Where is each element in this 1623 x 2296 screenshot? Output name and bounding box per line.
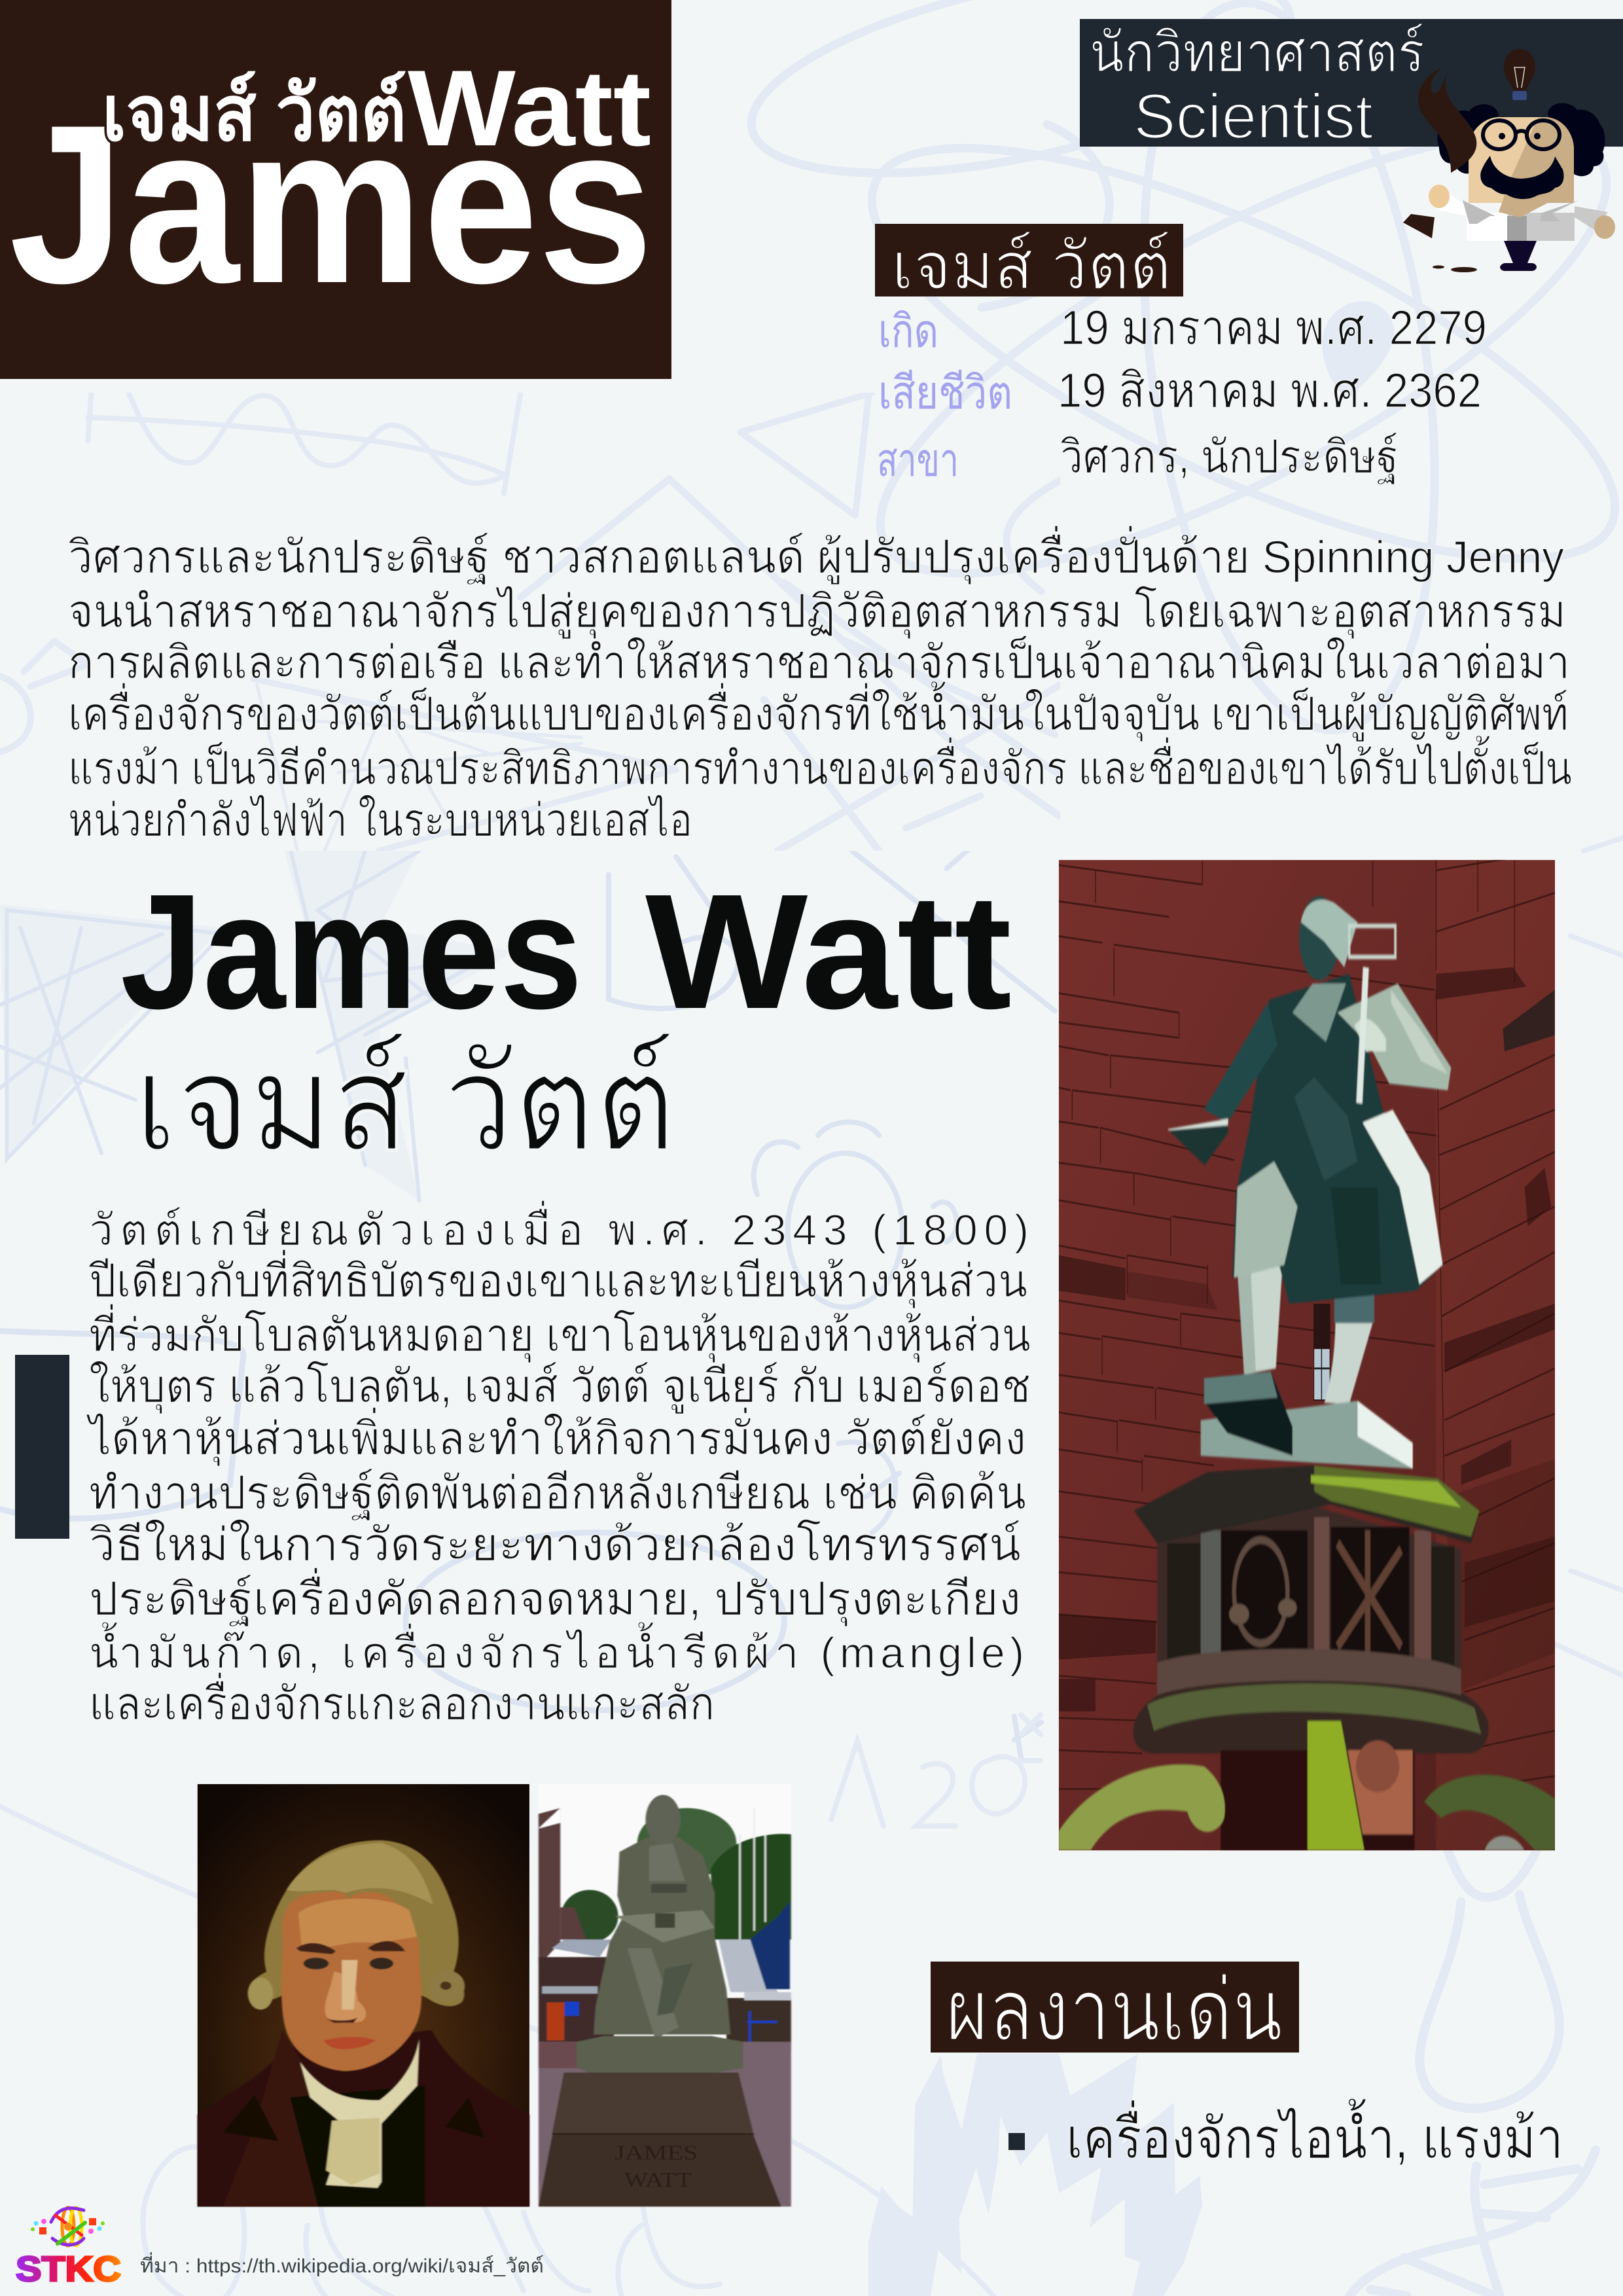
biography paragraph: ทำงานประดิษฐ์ติดพันต่ออีกหลังเกษียณ เช่น คิดค้น [89,1467,1026,1520]
biography paragraph: ปีเดียวกับที่สิทธิบัตรของเขาและทะเบียนห้างหุ้นส่วน [88,1249,1027,1309]
death value: 19 สิงหาคม พ.ศ. 2362 [1058,363,1482,418]
biography paragraph: และเครื่องจักรแกะลอกงานแกะสลัก [89,1672,715,1729]
plinth inscription: WATT [624,2169,692,2192]
category English: Scientist [1133,81,1373,152]
moustache [1480,156,1564,199]
intro paragraph: จนนำสหราชอาณาจักรไปสู่ยุคของการปฏิวัติอุตสาหกรรม โดยเฉพาะอุตสาหกรรม [68,585,1566,639]
face [281,1892,421,2071]
logo atom mark [31,2208,105,2246]
wig [248,1840,464,2006]
photo: portrait painting of Watt [196,1784,531,2208]
biography paragraph: ให้บุตร แล้วโบลตัน, เจมส์ วัตต์ จูเนียร์ กับ เมอร์ดอช [89,1360,1031,1414]
statue plinth and book [1201,1372,1413,1469]
scribbled fan doodle [0,851,1058,1759]
icon: cartoon scientist [1403,49,1615,272]
head [1469,117,1574,203]
background atom doodle [734,0,1623,749]
name label text: เจมส์ วัตต์ [891,230,1171,303]
coat [1467,213,1508,241]
coat [198,2030,529,2206]
glasses [1483,120,1560,149]
hands [1429,185,1450,208]
title block [0,0,671,379]
intro paragraph: หน่วยกำลังไฟฟ้า ในระบบหน่วยเอสไอ [68,794,692,846]
category banner [1080,19,1623,152]
title Thai name: เจมส์ วัตต์ [102,71,406,157]
intro paragraph [68,526,1572,846]
title Watt: Watt [408,48,651,168]
legs [1500,241,1537,271]
biography paragraph [86,1200,1031,1729]
highlight item: เครื่องจักรไอน้ำ, แรงม้า [1066,2098,1563,2170]
facts table [877,300,1487,486]
background graph, triangle and cone doodles [0,393,1060,851]
photo: seated Watt statue [537,1795,793,2208]
large English heading: James [120,860,582,1043]
biography paragraph: ที่ร่วมกับโบลตันหมดอายุ เขาโอนหุ้นของห้างหุ้นส่วน [89,1304,1031,1363]
trees [561,1890,618,1943]
plinth inscription [615,2142,698,2192]
pedestal [1059,1465,1555,1850]
logo [16,2208,121,2289]
statue [594,1837,730,2034]
birth label: เกิด [878,306,938,357]
category Thai: นักวิทยาศาสตร์ [1090,22,1425,83]
intro paragraph: วิศวกรและนักประดิษฐ์ ชาวสกอตแลนด์ ผู้ปรับปรุงเครื่องปั่นด้าย Spinning Jenny [68,526,1564,585]
plinth [577,2036,743,2073]
field label: สาขา [877,435,959,486]
large English heading [120,860,1012,1043]
icon: light bulb [1504,49,1535,100]
bullet [1008,2133,1025,2150]
highlights label [931,1962,1299,2058]
title James: James [9,79,653,331]
buildings [539,1808,560,1966]
biography paragraph: ประดิษฐ์เครื่องคัดลอกจดหมาย, ปรับปรุงตะเกียง [89,1568,1021,1627]
smoke [1418,68,1476,173]
background flames and flask doodles [868,1850,1600,2296]
biography paragraph: น้ำมันก๊าด, เครื่องจักรไอน้ำรีดผ้า (mangle) [89,1622,1024,1677]
logo wordmark: STKC [16,2250,121,2289]
biography paragraph: ได้หาหุ้นส่วนเพิ่มและทำให้กิจการมั่นคง วัตต์ยังคง [86,1407,1026,1467]
death label: เสียชีวิต [878,367,1012,418]
source credit: ที่มา : https://th.wikipedia.org/wiki/เจมส์_วัตต์ [140,2252,544,2277]
highlights label text: ผลงานเด่น [946,1962,1283,2058]
photo: Watt statue on pedestal [1059,860,1555,1851]
puddles [1451,267,1477,272]
cravat [300,2039,419,2188]
birth value: 19 มกราคม พ.ศ. 2279 [1060,300,1487,355]
biography paragraph: วิธีใหม่ในการวัดระยะทางด้วยกล้องโทรทรรศน์ [89,1518,1021,1570]
large English heading: Watt [645,860,1012,1043]
accent bar [15,1355,69,1539]
name label [875,224,1183,303]
flask liquid [1403,214,1435,238]
statue figure [1168,896,1451,1404]
field value: วิศวกร, นักประดิษฐ์ [1060,431,1399,484]
lower background doodles: formula [0,838,1623,2296]
hair [1437,103,1605,176]
plinth inscription: JAMES [615,2142,698,2164]
large Thai heading: เจมส์ วัตต์ [134,1029,676,1179]
biography paragraph: วัตต์เกษียณตัวเองเมื่อ พ.ศ. 2343 (1800) [89,1200,1029,1254]
